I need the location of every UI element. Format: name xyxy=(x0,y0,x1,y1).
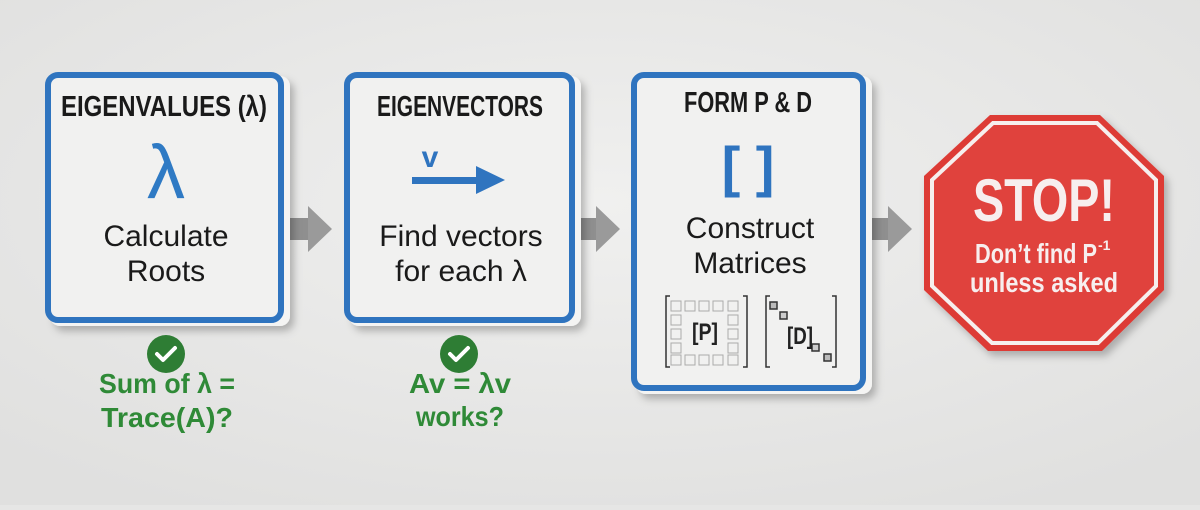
stop sign: unless asked xyxy=(970,267,1118,298)
icon: check circle 1 xyxy=(147,335,185,373)
heading: form P & D: FORM P & D xyxy=(684,87,812,119)
panel: eigenvalues: Roots xyxy=(127,255,205,288)
check: Av = lambda v: works? xyxy=(415,401,504,432)
icon: vector arrow xyxy=(412,141,505,194)
stop sign xyxy=(924,115,1164,351)
arrow: step 2 to 3 xyxy=(576,206,620,252)
icon: lambda: λ xyxy=(147,130,185,215)
panel: eigenvectors: for each λ xyxy=(395,255,527,288)
text: calculate roots: Calculate xyxy=(103,220,229,253)
text: STOP: STOP! xyxy=(973,167,1115,234)
check: Av = lambda v xyxy=(409,335,511,432)
arrow: step 1 to 2 xyxy=(288,206,332,252)
check: trace: Trace(A)? xyxy=(101,402,233,433)
panel: eigenvectors xyxy=(347,75,581,326)
text: don't find P inverse: Don’t find P xyxy=(975,238,1097,269)
arrow: step 3 to stop xyxy=(868,206,912,252)
icon: check circle 2 xyxy=(440,335,478,373)
text: find vectors: Find vectors xyxy=(379,220,543,253)
panel: eigenvalues xyxy=(48,75,290,326)
panel: form P and D: [D] xyxy=(787,323,813,350)
panel: form P and D: [P] xyxy=(692,319,718,346)
heading: eigenvectors: EIGENVECTORS xyxy=(377,91,543,123)
text: construct matrices: Construct xyxy=(686,212,815,245)
text: Av = lambda v works: Av = λv xyxy=(409,368,511,399)
icon: matrix P xyxy=(666,296,747,367)
icon: matrix D xyxy=(766,296,836,367)
heading: eigenvalues: EIGENVALUES (λ) xyxy=(61,91,267,123)
stop sign: -1 xyxy=(1098,237,1111,253)
icon: vector arrow: v xyxy=(422,141,439,174)
check: trace xyxy=(99,335,235,433)
icon: brackets: [ ] xyxy=(722,135,774,198)
panel: form P and D: Matrices xyxy=(693,247,807,280)
panel: form P and D xyxy=(634,75,872,394)
text: sum of lambda: Sum of λ = xyxy=(99,368,235,399)
